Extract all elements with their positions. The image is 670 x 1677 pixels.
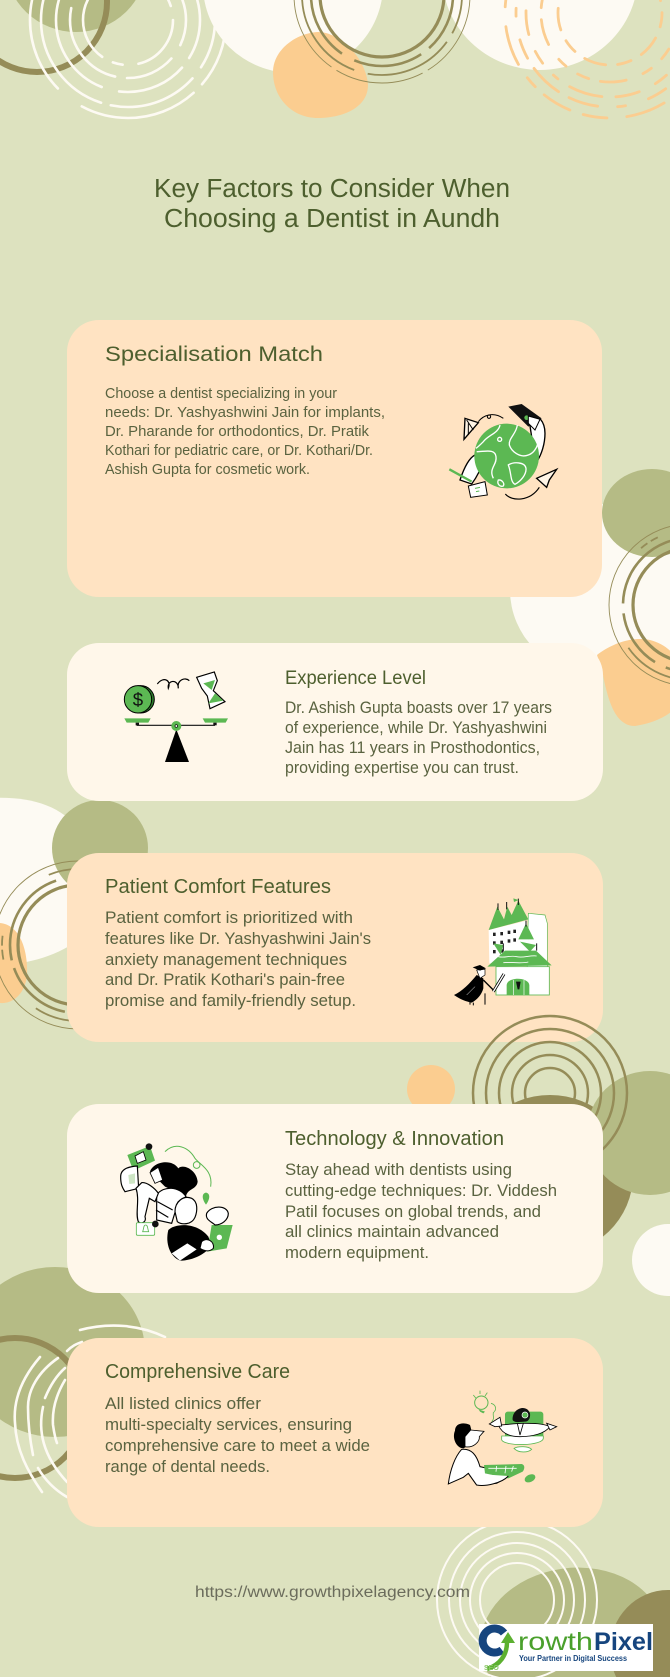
heading: experience level: Experience Level xyxy=(285,667,426,689)
panel: experience level xyxy=(67,643,603,801)
panel: technology and innovation xyxy=(67,1104,603,1293)
text block: technology and innovation: Stay ahead with dentists using xyxy=(285,1161,512,1179)
icon: balance scale with coin and hourglass xyxy=(124,672,228,762)
text block: technology and innovation: modern equipment. xyxy=(285,1244,429,1262)
text block: experience level xyxy=(285,699,552,777)
heading: comprehensive care: Comprehensive Care xyxy=(105,1361,290,1383)
text block: comprehensive care: range of dental needs. xyxy=(105,1458,270,1476)
text block: comprehensive care: comprehensive care to meet a wide xyxy=(105,1437,370,1455)
panel: comprehensive care xyxy=(67,1338,603,1527)
decorative shapes: bottom right xyxy=(437,1520,670,1677)
text block: specialisation match: Ashish Gupta for cosmetic work. xyxy=(105,462,310,478)
text block: specialisation match: Dr. Pharande for orthodontics, Dr. Pratik xyxy=(105,424,370,440)
title: Choosing a Dentist in Aundh xyxy=(164,205,500,233)
logo: GrowthPixel: Pixel xyxy=(594,1628,653,1656)
icon: person at keyboard with video call xyxy=(448,1391,557,1485)
text block: technology and innovation: Patil focuses on global trends, and xyxy=(285,1203,541,1221)
text block: technology and innovation: all clinics maintain advanced xyxy=(285,1223,499,1241)
panel: patient comfort features xyxy=(67,853,603,1042)
text block: specialisation match: Kothari for pediatric care, or Dr. Kothari/Dr. xyxy=(105,443,373,459)
heading: technology and innovation: Technology & Innovation xyxy=(285,1128,504,1150)
text block: comprehensive care: multi-specialty services, ensuring xyxy=(105,1416,352,1434)
decorative shapes: right lower xyxy=(407,1065,670,1296)
panel: specialisation match xyxy=(67,320,602,597)
text block: patient comfort features xyxy=(105,909,371,1010)
logo: GrowthPixel: Your Partner in Digital Success xyxy=(519,1654,627,1663)
text block: patient comfort features: anxiety management techniques xyxy=(105,951,347,969)
heading: specialisation match: Specialisation Match xyxy=(105,343,323,366)
title: Key Factors to Consider When xyxy=(154,175,510,203)
text block: experience level: providing expertise you can trust. xyxy=(285,759,519,777)
text block: specialisation match xyxy=(105,386,385,478)
logo: GrowthPixel xyxy=(479,1624,653,1672)
decorative shapes: top band xyxy=(0,0,670,118)
decorative shapes: left lower xyxy=(0,1267,165,1497)
text block: patient comfort features: Patient comfort is prioritized with xyxy=(105,909,353,927)
text block: experience level: Dr. Ashish Gupta boasts over 17 years xyxy=(285,699,552,717)
decorative concentric rings between panels xyxy=(473,1016,627,1170)
text block: patient comfort features: and Dr. Pratik Kothari's pain-free xyxy=(105,971,345,989)
logo: GrowthPixel: rowth xyxy=(518,1628,593,1656)
icon: castle with caped figure xyxy=(454,898,552,1005)
decorative shapes: left middle xyxy=(0,798,162,1029)
icon: globe with hands and paper planes xyxy=(449,404,557,499)
text block: comprehensive care: All listed clinics offer xyxy=(105,1395,262,1413)
text block: specialisation match: needs: Dr. Yashyashwini Jain for implants, xyxy=(105,405,385,421)
text block: patient comfort features: features like Dr. Yashyashwini Jain's xyxy=(105,930,371,948)
text block: specialisation match: Choose a dentist specializing in your xyxy=(105,386,337,402)
text block: technology and innovation: cutting-edge techniques: Dr. Viddesh xyxy=(285,1182,557,1200)
logo: GrowthPixel: SEO xyxy=(484,1665,499,1672)
text block: experience level: of experience, while Dr. Yashyashwini xyxy=(285,719,547,737)
title xyxy=(154,175,510,233)
text block: comprehensive care xyxy=(105,1395,370,1476)
text block: patient comfort features: promise and family-friendly setup. xyxy=(105,992,356,1010)
icon: balance scale with coin and hourglass: $ xyxy=(133,689,144,710)
text block: experience level: Jain has 11 years in Prosthodontics, xyxy=(285,739,540,757)
website url: https://www.growthpixelagency.com xyxy=(195,1584,470,1601)
decorative shapes: right middle xyxy=(510,469,670,726)
icon: two people with devices xyxy=(121,1143,233,1261)
heading: patient comfort features: Patient Comfort Features xyxy=(105,876,331,898)
text block: technology and innovation xyxy=(285,1161,557,1262)
